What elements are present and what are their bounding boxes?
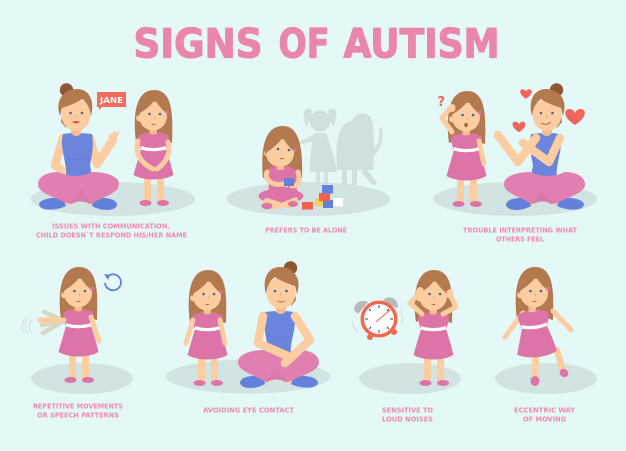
mother figure — [38, 83, 120, 210]
panel: trouble interpreting feelings — [433, 83, 597, 244]
caption: ECCENTRIC WAY — [514, 406, 576, 415]
child figure — [410, 270, 456, 386]
toy blocks — [302, 185, 343, 210]
mother figure — [238, 261, 319, 388]
title: AUTISM — [344, 22, 500, 68]
caption — [36, 222, 187, 240]
mother figure — [498, 83, 585, 210]
floor shadow — [166, 360, 330, 394]
panel: eccentric way of moving — [495, 267, 597, 424]
icon: repeat arrow — [104, 274, 121, 290]
icon: alarm clock — [352, 297, 403, 340]
child figure — [442, 91, 486, 207]
floor shadow — [495, 363, 597, 394]
caption: CHILD DOESN`T RESPOND HIS/HER NAME — [36, 231, 187, 240]
panel: repetitive movements — [22, 267, 133, 420]
child figure — [186, 270, 228, 386]
child figure — [134, 90, 174, 206]
floor shadow — [226, 182, 390, 216]
child figure — [505, 267, 571, 386]
title — [134, 22, 500, 68]
floor shadow — [31, 363, 133, 394]
floor shadow — [31, 182, 195, 216]
speech bubble: Jane: JANE — [99, 96, 123, 105]
question mark: ? — [438, 95, 445, 110]
panel: avoiding eye contact — [166, 261, 330, 415]
caption: REPETITIVE MOVEMENTS — [33, 402, 123, 411]
panel: prefers to be alone — [226, 109, 390, 235]
panel: issues with communication — [31, 83, 195, 240]
caption: AVOIDING EYE CONTACT — [203, 406, 294, 415]
caption — [514, 406, 576, 424]
caption — [463, 226, 577, 244]
sitting child — [258, 126, 304, 210]
caption: PREFERS TO BE ALONE — [265, 226, 347, 235]
floor shadow — [433, 182, 597, 216]
caption: OR SPEECH PATTERNS — [37, 411, 119, 420]
caption — [382, 406, 433, 424]
floor shadow — [359, 363, 461, 394]
motion ghost arms — [22, 312, 62, 334]
child figure — [40, 267, 99, 383]
silhouettes of other children — [300, 109, 383, 186]
hearts — [513, 89, 585, 132]
caption: OF MOVING — [523, 415, 566, 424]
caption: LOUD NOISES — [382, 415, 433, 424]
speech bubble: Jane — [97, 92, 126, 110]
caption: ISSUES WITH COMMUNICATION. — [52, 222, 170, 231]
title: OF — [278, 22, 330, 68]
panel: sensitive to loud noises — [352, 270, 461, 424]
caption: SENSITIVE TO — [382, 406, 433, 415]
caption: TROUBLE INTERPRETING WHAT — [463, 226, 577, 235]
caption: OTHERS FEEL — [496, 235, 544, 244]
title: SIGNS — [134, 22, 262, 68]
caption — [33, 402, 123, 420]
